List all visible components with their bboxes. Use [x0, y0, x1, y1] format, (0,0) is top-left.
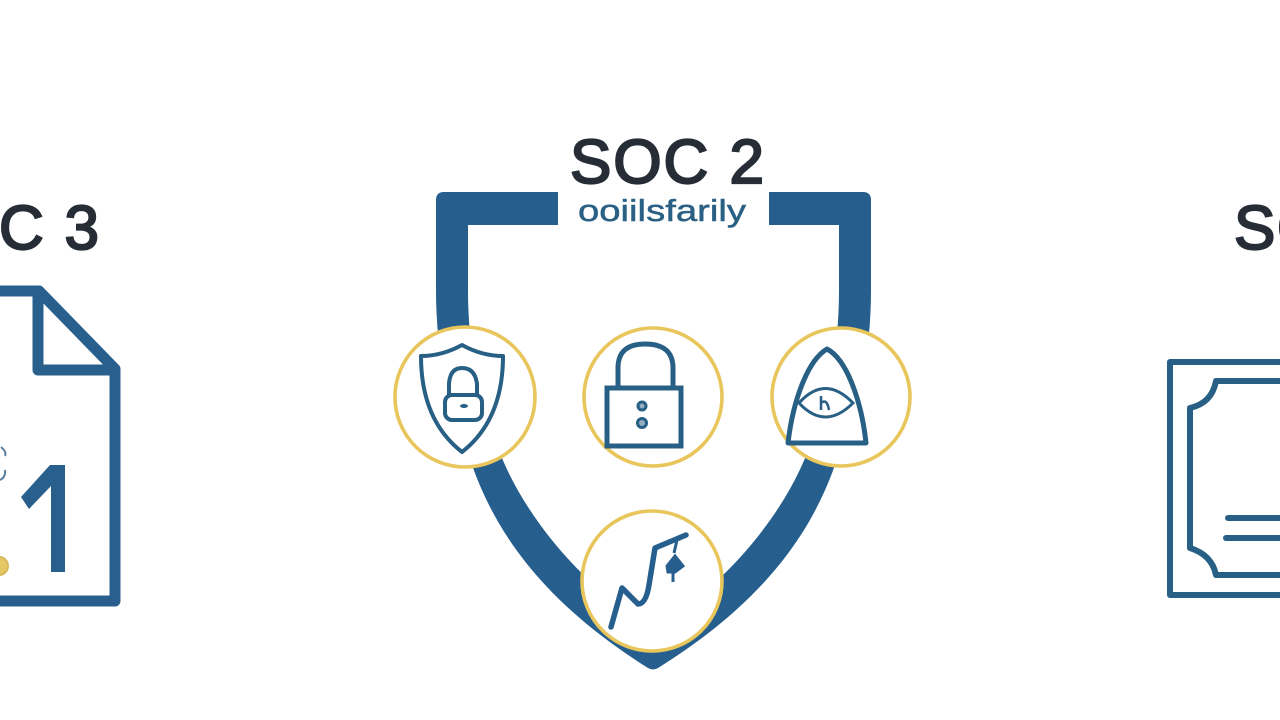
icon: gold seal — [0, 557, 8, 575]
shield outline — [436, 192, 871, 670]
circle icon: shield with lock — [395, 327, 535, 467]
certificate text lines — [1226, 518, 1280, 538]
circle icon: arch with eye — [772, 328, 910, 466]
subtitle: ooiilsfarily — [578, 193, 747, 228]
panel: SOC 3 left document — [0, 194, 115, 601]
icon: certificate frame — [1170, 362, 1280, 595]
circle icon: rising chart line — [582, 511, 722, 651]
letter fragment on document — [0, 447, 6, 480]
heading: SOC 2: SOC 2 — [570, 128, 764, 197]
panel: SOC 2 shield — [395, 128, 910, 670]
icon: document with folded corner — [0, 291, 115, 601]
panel: SOC 1 right certificate — [1170, 194, 1280, 595]
circle icon: padlock — [584, 328, 722, 466]
large numeral 1 on document — [21, 465, 65, 572]
